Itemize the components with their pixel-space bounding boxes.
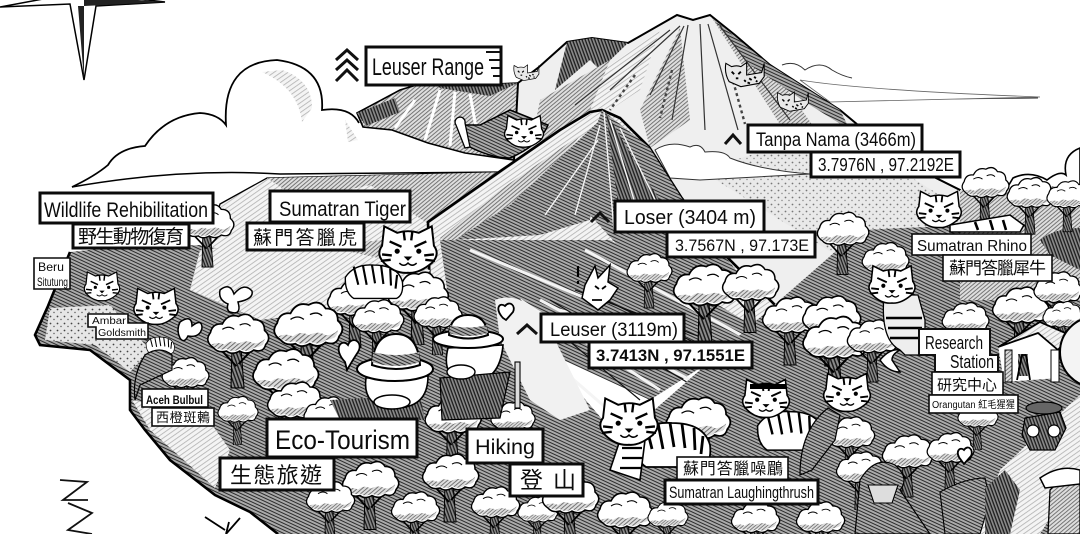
goat [578, 265, 618, 310]
icon: aceh bulbul bird [134, 350, 172, 400]
mountain: Leuser Range left summit [357, 80, 550, 160]
label: Sumatran Tiger [247, 191, 410, 250]
far right cloud and treeline [960, 148, 1080, 300]
label: Research Station: Orangutan 紅毛猩猩 [932, 399, 1015, 411]
research station hut [998, 322, 1070, 382]
label: Ambar Goldsmith [88, 314, 148, 339]
label: Aceh Bulbul [142, 389, 214, 426]
label: Sumatran Tiger: 蘇門答臘虎 [253, 227, 357, 249]
label: Eco-Tourism: Eco-Tourism [275, 425, 410, 455]
label: Leuser summit [517, 314, 752, 368]
icon: hearts [339, 304, 972, 464]
label: Tanpa Nama summit: Tanpa Nama (3466m) [756, 130, 916, 151]
tiger: sitting tiger with sunglasses [743, 380, 824, 450]
label: Beru Situtung: Beru [38, 260, 64, 274]
label: Leuser Range [366, 47, 501, 85]
label: Loser summit [591, 201, 815, 257]
label: Tanpa Nama summit: 3.7976N , 97.2192E [818, 155, 954, 175]
icon: north arrows [60, 480, 92, 534]
label: Hiking: 登山 [520, 467, 576, 493]
round scenic lens at right edge [1060, 317, 1080, 387]
label: Leuser Range: Leuser Range [372, 54, 484, 81]
hiker two with hat and pole [433, 315, 520, 420]
label: Aceh Bulbul: Aceh Bulbul [146, 393, 203, 407]
label: Sumatran Laughingthrush: Sumatran Laughingthrush [669, 483, 814, 502]
label: Sumatran Laughingthrush: 蘇門答臘噪鶥 [683, 460, 783, 478]
label: Research Station: Research [925, 333, 983, 353]
label: Wildlife Rehabilitation [40, 193, 213, 248]
label: Aceh Bulbul: 西橙斑鶇 [156, 410, 210, 425]
label: Loser summit: 3.7567N , 97.173E [675, 236, 809, 255]
tiger: standing tiger at centre right [869, 266, 925, 355]
label: Leuser summit: Leuser (3119m) [550, 320, 678, 341]
label: Ambar Goldsmith: Ambar [92, 316, 127, 327]
icon: compass star [0, 0, 165, 80]
label: Leuser summit: 3.7413N , 97.1551E [596, 346, 745, 365]
tigers: rehabilitation centre [84, 248, 185, 354]
label: Hiking: Hiking [475, 436, 535, 459]
label: Hiking [467, 429, 583, 496]
label: Loser summit: Loser (3404 m) [624, 207, 756, 229]
label: Beru Situtung [34, 258, 70, 289]
label: Research Station [919, 329, 1018, 413]
back cloud on left [72, 60, 500, 187]
label: Ambar Goldsmith: Goldsmith [98, 328, 146, 339]
mountain: Loser peak [428, 110, 790, 420]
tiger: front big tiger [600, 398, 710, 480]
hiker one with hat [330, 334, 433, 420]
label: Tanpa Nama summit [725, 125, 960, 177]
forest: tree canopy [162, 168, 1080, 534]
icon: triple chevrons [336, 50, 358, 81]
Leuser foothill white path [495, 298, 590, 420]
label: Sumatran Rhino: 蘇門答臘犀牛 [949, 259, 1046, 278]
macaque and wildlife along the bottom [855, 462, 1080, 534]
horizon line and mid cloud [72, 144, 810, 187]
mountain: Tanpa Nama main peak [480, 15, 1000, 320]
label: Sumatran Tiger: Sumatran Tiger [279, 198, 406, 221]
label: Research Station: Station [950, 352, 994, 372]
bird: laughingthrush perched [800, 408, 840, 475]
label: Eco-Tourism [220, 419, 417, 490]
label: Sumatran Rhino [912, 234, 1052, 281]
bottom left plant sprig [205, 517, 240, 534]
mountain: left foothill slopes [200, 172, 510, 300]
right side distant cloud [782, 63, 1040, 102]
icon: butterflies [178, 287, 252, 341]
label: Sumatran Rhino: Sumatran Rhino [917, 238, 1027, 255]
leopard on ridge [455, 110, 548, 158]
ground: coastline and forest floor [35, 220, 1080, 534]
label: Research Station: 研究中心 [937, 377, 997, 394]
small leopards on the peak [514, 62, 808, 111]
label: Sumatran Laughingthrush [665, 457, 818, 504]
label: Wildlife Rehabilitation: Wildlife Rehibilitation [44, 199, 208, 222]
label: Eco-Tourism: 生態旅遊 [230, 463, 322, 488]
label: Beru Situtung: Situtung [37, 275, 68, 289]
tiger: third tiger by the label [824, 350, 900, 411]
ranger character [1022, 402, 1066, 450]
label: Wildlife Rehabilitation: 野生動物復育 [78, 226, 184, 248]
tiger: resting tiger at top right [917, 191, 1025, 232]
tiger: Sumatran tiger on the ridge [345, 226, 437, 298]
